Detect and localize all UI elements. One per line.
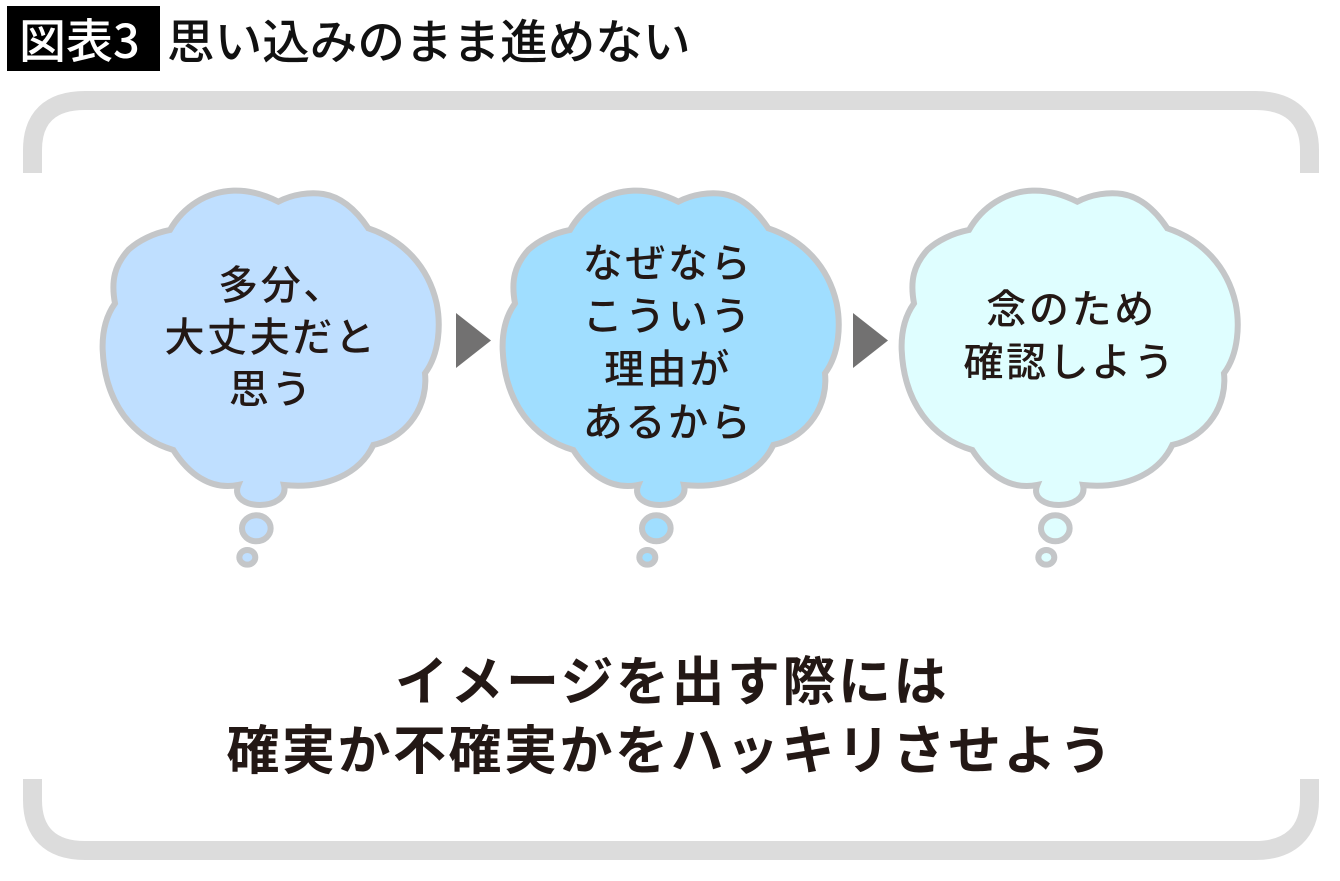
title badge: 図表3: [19, 3, 140, 72]
thought bubble 2: [503, 191, 839, 565]
conclusion message: イメージを出す際には: [395, 640, 949, 716]
bubble 2 text: あるから: [583, 390, 753, 448]
frame: top bracket: [32, 100, 1310, 173]
conclusion message: [226, 640, 1114, 785]
arrow 2: [853, 313, 888, 368]
thought bubble 3: [902, 191, 1238, 565]
arrow 1: [456, 313, 491, 368]
bubble 3 text: 確認しよう: [964, 330, 1176, 388]
bubble 1 text: 多分、: [218, 253, 346, 311]
conclusion message: 確実か不確実かをハッキリさせよう: [226, 709, 1114, 785]
bubble 1 text: 大丈夫だと: [164, 305, 378, 363]
title: 思い込みのまま進めない: [167, 4, 691, 73]
bubble 2 text: [583, 231, 753, 448]
thought bubble 1: [103, 191, 439, 565]
bubble 2 text: こういう: [583, 284, 753, 342]
bubble 3 text: 念のため: [986, 277, 1157, 335]
bubble 3 text: [964, 277, 1176, 388]
bubble 1 text: 思う: [229, 357, 314, 415]
bubble 1 text: [164, 253, 378, 415]
bubble 2 text: なぜなら: [583, 231, 753, 289]
bubble 2 text: 理由が: [604, 337, 732, 395]
frame: bottom bracket: [32, 779, 1310, 850]
